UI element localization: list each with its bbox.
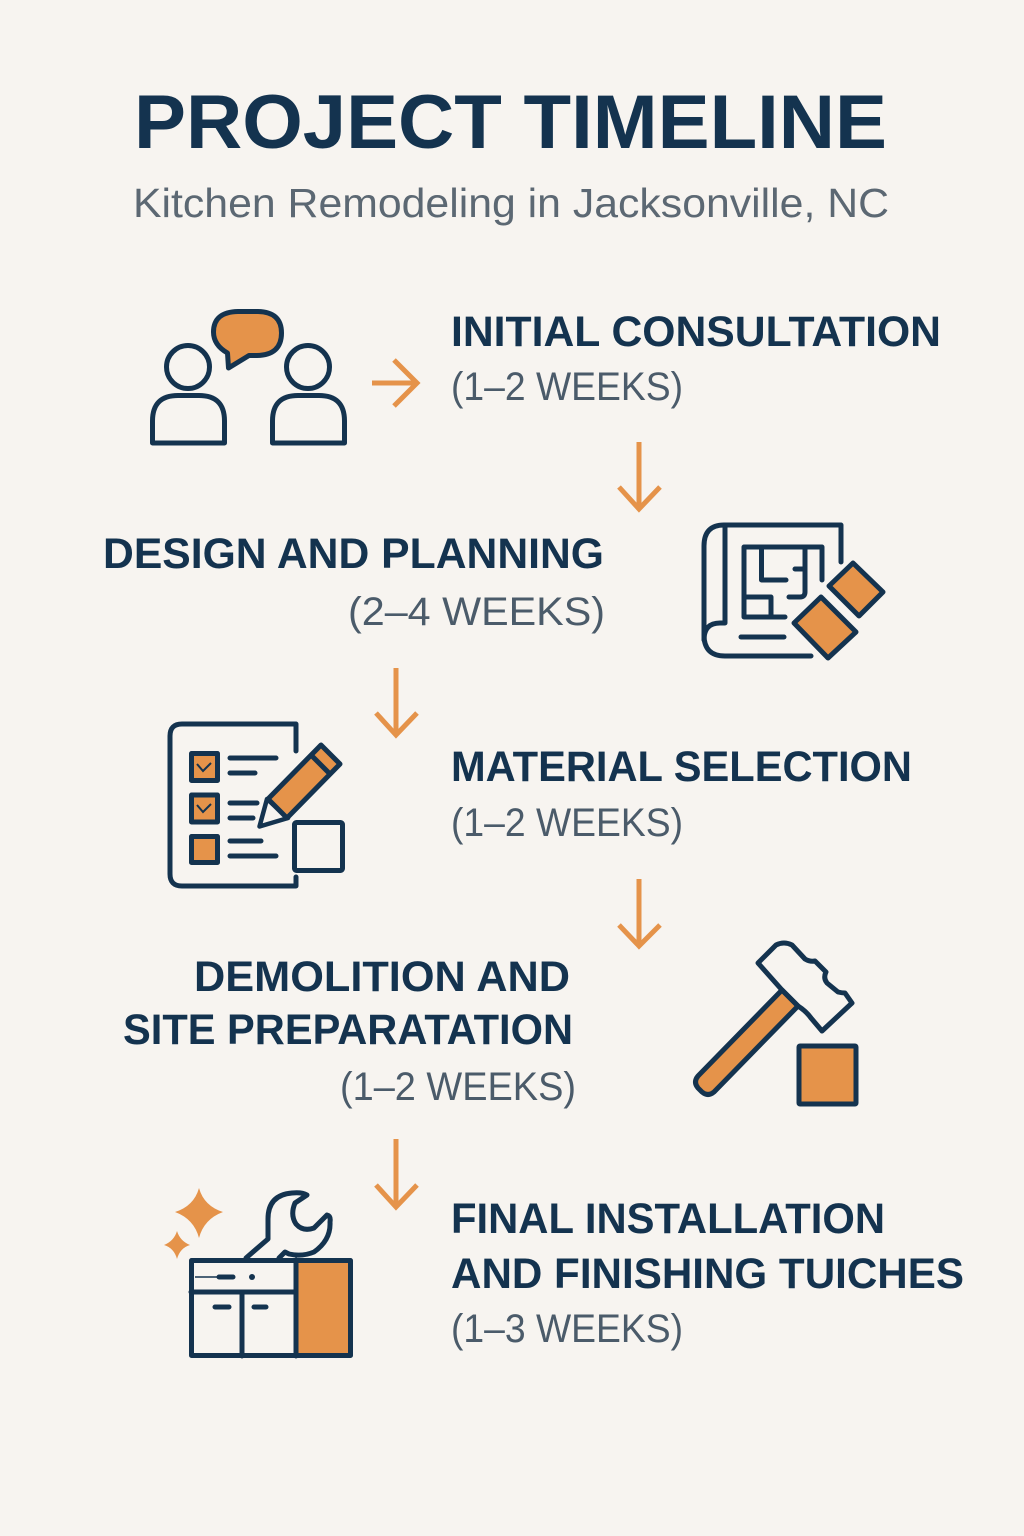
icon: checklist with pencil	[170, 724, 342, 886]
arrow: down to step 4	[619, 879, 660, 946]
arrow: step 1 to heading	[372, 360, 417, 406]
step 2 heading: DESIGN AND PLANNING	[103, 530, 604, 578]
step 2 duration: (2–4 WEEKS)	[348, 590, 605, 634]
subtitle: Kitchen Remodeling in Jacksonville, NC	[133, 180, 889, 226]
step 1 duration: (1–2 WEEKS)	[451, 365, 683, 409]
step 1 heading: INITIAL CONSULTATION	[451, 308, 941, 356]
arrow: down to step 3	[376, 668, 417, 735]
icon: consultation people with speech bubble	[152, 312, 344, 443]
icon: cabinet with wrench and sparkles	[164, 1188, 350, 1356]
title: PROJECT TIMELINE	[134, 80, 887, 165]
step 5 heading second line: AND FINISHING TUICHES	[451, 1250, 964, 1298]
step 4 heading: DEMOLITION AND	[194, 953, 570, 1001]
step 3 heading: MATERIAL SELECTION	[451, 743, 912, 791]
step 4 heading second line: SITE PREPARATATION	[123, 1006, 573, 1054]
step 5 duration: (1–3 WEEKS)	[451, 1307, 683, 1351]
step 4 duration: (1–2 WEEKS)	[340, 1065, 576, 1109]
arrow: down to step 5	[376, 1139, 417, 1207]
step 5 heading: FINAL INSTALLATION	[451, 1195, 885, 1243]
icon: blueprint with tiles	[704, 525, 883, 658]
icon: hammer and block	[696, 943, 856, 1104]
step 3 duration: (1–2 WEEKS)	[451, 801, 683, 845]
arrow: down to step 2	[619, 442, 660, 509]
